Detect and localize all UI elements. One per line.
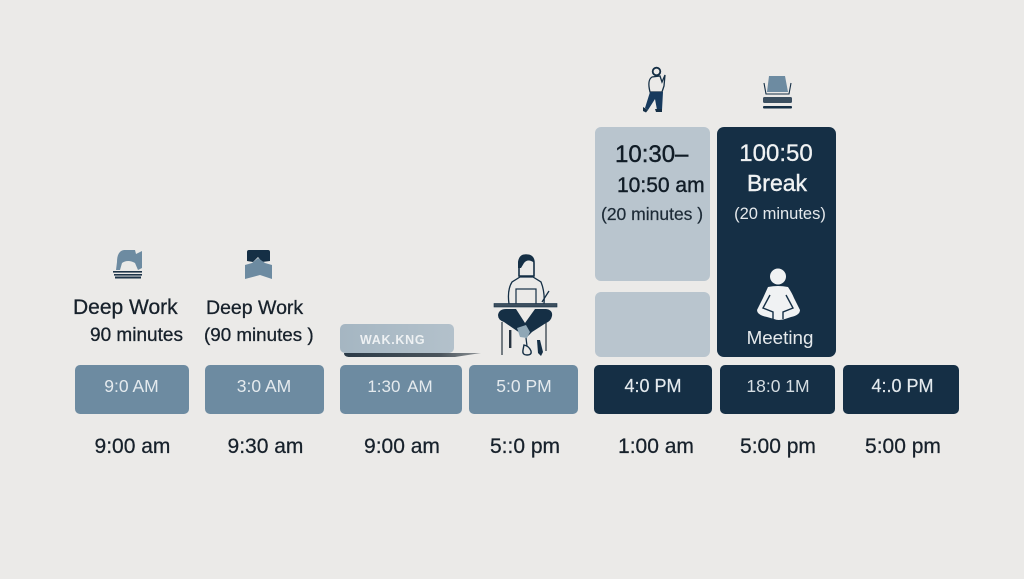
- time labels: 5:00 pm: [865, 435, 941, 458]
- panel: 10:30 light: (20 minutes ): [601, 204, 703, 224]
- label: deep work 2: (90 minutes ): [204, 324, 314, 345]
- time bar 1: [75, 365, 189, 414]
- time labels: 9:30 am: [228, 435, 303, 458]
- time labels: 1:00 am: [618, 435, 694, 458]
- panel: break dark: Meeting: [747, 327, 813, 348]
- panel: break dark: 100:50: [739, 140, 813, 167]
- time labels: 9:00 am: [95, 435, 170, 458]
- panel: 10:30 light: [595, 127, 710, 281]
- panel: break dark: [717, 127, 836, 357]
- time bar 6: [720, 365, 835, 414]
- label: deep work 2: [204, 297, 314, 345]
- icon: person at laptop: [494, 255, 557, 356]
- time labels: 5::0 pm: [490, 435, 560, 458]
- panel: break dark: (20 minutes): [734, 205, 826, 223]
- icon: walking person: [643, 68, 665, 112]
- label: deep work 2: Deep Work: [206, 297, 303, 319]
- label: deep work 1: Deep Work: [73, 296, 178, 319]
- time bar 6: 18:0 1M: [746, 376, 810, 396]
- time bar 1: 9:0 AM: [104, 376, 159, 396]
- time bar 4: 5:0 PM: [496, 376, 552, 396]
- panel: 10:30 light: 10:50 am: [617, 174, 705, 197]
- icon: meeting person: [757, 268, 800, 320]
- time bar 5: [594, 365, 712, 414]
- time bar 4: [469, 365, 578, 414]
- time bar 2: 3:0 AM: [237, 376, 291, 396]
- panel: light lower: [595, 292, 710, 357]
- label: deep work 1: [73, 296, 183, 346]
- time labels: [95, 435, 941, 458]
- time bar 5: 4:0 PM: [624, 376, 682, 396]
- time labels: 9:00 am: [364, 435, 440, 458]
- icon: seat 3: [763, 76, 792, 108]
- icon: seat 2: [245, 250, 272, 279]
- icon: chair 1: [113, 250, 142, 278]
- time bar 7: 4:.0 PM: [871, 376, 934, 396]
- panel: break dark: Break: [747, 170, 808, 196]
- time bar 7: [843, 365, 959, 414]
- walking tag: [340, 324, 481, 357]
- time bar 2: [205, 365, 324, 414]
- time bar 3: 1:30 AM: [367, 377, 433, 396]
- label: deep work 1: 90 minutes: [90, 325, 183, 346]
- time bar 3: [340, 365, 462, 414]
- panel: 10:30 light: 10:30–: [615, 141, 689, 168]
- walking tag: WAK.KNG: [360, 333, 425, 347]
- time labels: 5:00 pm: [740, 435, 816, 458]
